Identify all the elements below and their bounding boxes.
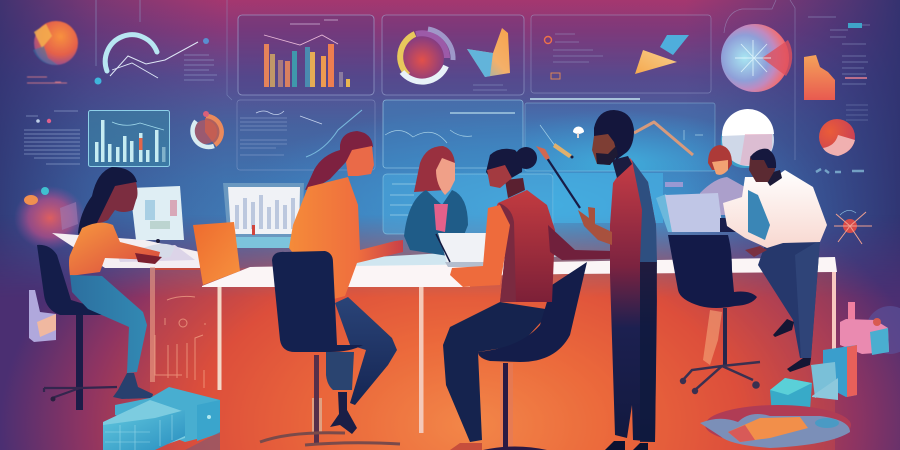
chair seat shell [478, 262, 587, 362]
sweater [289, 177, 403, 300]
chart: radial globe [721, 0, 795, 160]
dashboard: orange planet chart [27, 21, 78, 83]
icon: folded 3D chart [467, 28, 510, 77]
orange top and arm [69, 223, 160, 276]
bun [515, 147, 537, 169]
panel: bar chart top [238, 15, 374, 95]
panel: bright data screens [383, 99, 715, 234]
shirt [723, 170, 827, 248]
laptop: right [656, 193, 745, 232]
neck [505, 178, 525, 198]
shoes [773, 319, 794, 337]
neck [612, 156, 632, 178]
body and trousers [610, 158, 657, 442]
shoe [113, 373, 153, 399]
legs [758, 240, 820, 358]
shoes [605, 441, 625, 450]
box: blue teal crate bottom-left [103, 387, 220, 450]
icon: pointer stick and pencil [536, 143, 580, 208]
icon: blue cubes right [770, 345, 857, 415]
document: papers on table [436, 233, 508, 267]
orange arm [450, 205, 510, 287]
chair: left [37, 245, 117, 410]
hand and arm [578, 207, 612, 245]
laptop: center screen [223, 183, 304, 248]
stool [500, 363, 513, 450]
chart: white sphere [721, 109, 774, 168]
chart: ghost chart on wall [155, 296, 205, 388]
hair and ponytail [305, 131, 373, 190]
person: woman with bun and red top [443, 147, 648, 450]
person: woman in blue jacket [404, 146, 468, 256]
puddle: reflective floor shape [700, 405, 851, 448]
head [749, 150, 775, 182]
laptop: left screen [130, 186, 184, 260]
icon: blurred haze bubbles left [14, 186, 86, 250]
folder: orange [193, 222, 240, 285]
icon: mushroom marker [573, 126, 584, 138]
hair [78, 167, 137, 250]
panel: donut chart [382, 15, 524, 95]
table: left section [52, 233, 200, 382]
dark right trouser [640, 262, 657, 442]
head [594, 110, 634, 160]
person: man in white shirt [723, 149, 827, 372]
arrow: tan rising line [634, 122, 693, 155]
box: small lavender box left [29, 290, 56, 342]
shoes [330, 392, 357, 434]
panel: arrow shape chart [531, 15, 711, 93]
person: seated woman left with chair [37, 167, 162, 410]
panel: text lines left [24, 111, 80, 164]
floor and under-table wall [0, 215, 900, 450]
chart: small donut [193, 111, 222, 147]
chair: right [668, 235, 760, 394]
panel: line chart with text lines [237, 100, 375, 170]
icon: pink crystal pile right [840, 302, 900, 355]
dashboard: gauge with line graph [94, 0, 232, 100]
torso [488, 190, 555, 302]
icon: starburst right [834, 210, 872, 244]
person: woman in orange sweater with chair [260, 131, 403, 445]
face [96, 182, 138, 225]
panel: teal bar chart [88, 110, 170, 166]
panel: right stats column [804, 17, 870, 173]
icon: small dots [36, 119, 51, 123]
person: smiling woman background [700, 145, 750, 215]
blue legs [70, 275, 147, 373]
hand [745, 246, 767, 257]
person: standing man with beard [578, 110, 657, 450]
head [486, 149, 522, 184]
maroon arm [548, 225, 648, 260]
neck [763, 170, 782, 186]
chair back [272, 251, 363, 352]
blue side [632, 160, 657, 262]
chair stem and base [312, 398, 322, 432]
dark legs [443, 302, 552, 442]
legs [335, 297, 397, 405]
face [346, 146, 374, 176]
table: main section [155, 250, 837, 433]
